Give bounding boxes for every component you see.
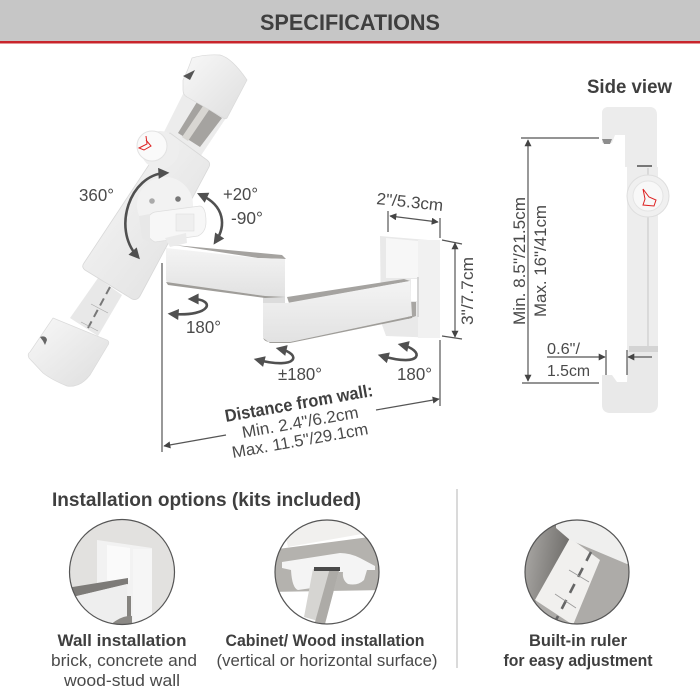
dimension: distance from wall: Distance from wall: — [223, 380, 374, 426]
upper arm — [166, 245, 286, 298]
dimension: distance from wall — [162, 263, 440, 462]
rotation arrow: tilt — [201, 195, 222, 241]
label: 180 left: 180° — [186, 317, 221, 337]
elbow knuckle — [263, 292, 285, 304]
rotation arrow: arm base — [172, 299, 207, 314]
tablet holder — [28, 55, 247, 386]
swivel hinge cylinder — [139, 206, 206, 247]
side view knob with logo — [627, 175, 669, 217]
dimension: bracket height: 3"/7.7cm — [459, 257, 477, 325]
label: plus minus 180: ±180° — [278, 364, 322, 384]
rotation label: 360: 360° — [79, 185, 114, 205]
dimension: distance from wall: Min. 2.4"/6.2cm — [241, 404, 360, 442]
caption: wall installation: wood-stud wall — [63, 671, 180, 690]
side view dimension: height range: Max. 16"/41cm — [531, 205, 550, 317]
caption: wall installation: Wall installation — [58, 631, 186, 650]
side view dimension: hook depth — [547, 341, 652, 380]
side view dimension: height range — [510, 138, 599, 383]
clamp notch — [183, 70, 195, 80]
caption: built-in ruler: for easy adjustment — [504, 651, 653, 670]
caption: cabinet installation: Cabinet/ Wood installation — [226, 631, 424, 650]
dimension: bracket width — [376, 190, 444, 238]
side view dimension: hook depth: 0.6"/ — [547, 341, 581, 358]
caption: wall installation — [51, 631, 197, 690]
holder plate — [83, 133, 210, 300]
side view dimension: height range: Min. 8.5"/21.5cm — [510, 197, 529, 325]
side view slider — [627, 167, 658, 352]
caption: cabinet installation — [216, 631, 438, 670]
dimension: distance from wall: Max. 11.5"/29.1cm — [231, 420, 370, 462]
holder bottom clamp — [28, 318, 109, 386]
bracket back plate — [380, 236, 440, 338]
divider — [456, 489, 458, 668]
tilt label: -90: -90° — [231, 208, 263, 228]
photo: wall installation — [68, 518, 176, 626]
side view upper clamp — [602, 107, 657, 167]
caption: cabinet installation: (vertical or horizontal surface) — [216, 651, 438, 670]
side view dimension: hook depth: 1.5cm — [547, 363, 590, 380]
caption: wall installation: brick, concrete and — [51, 651, 197, 670]
caption: built-in ruler — [504, 631, 653, 670]
rotation arrow: elbow — [258, 349, 293, 363]
dimension: bracket width: 2"/5.3cm — [376, 190, 444, 215]
photo: built-in ruler — [524, 519, 630, 625]
photo: cabinet installation — [274, 519, 380, 625]
label: 180 right: 180° — [397, 364, 432, 384]
lower arm — [263, 279, 412, 343]
caption: built-in ruler: Built-in ruler — [529, 631, 627, 650]
side view device — [602, 107, 669, 413]
swing arm — [166, 236, 440, 343]
dimension: bracket height — [442, 240, 477, 339]
holder top clamp — [183, 55, 247, 119]
holder upper rail — [164, 92, 226, 160]
rotation arrow: wall — [382, 345, 417, 360]
side view heading: Side view — [587, 77, 672, 98]
holder knob with logo — [137, 131, 179, 169]
swivel disc — [137, 177, 193, 233]
holder lower rail with ruler — [70, 278, 122, 336]
rotation arrow: 360 — [125, 173, 165, 256]
title: SPECIFICATIONS — [260, 10, 440, 35]
installation heading: Installation options (kits included) — [52, 489, 361, 511]
header band — [0, 0, 700, 44]
bottom clamp notch — [40, 336, 47, 345]
tilt label: +20: +20° — [223, 184, 258, 204]
side view lower clamp — [602, 351, 658, 413]
